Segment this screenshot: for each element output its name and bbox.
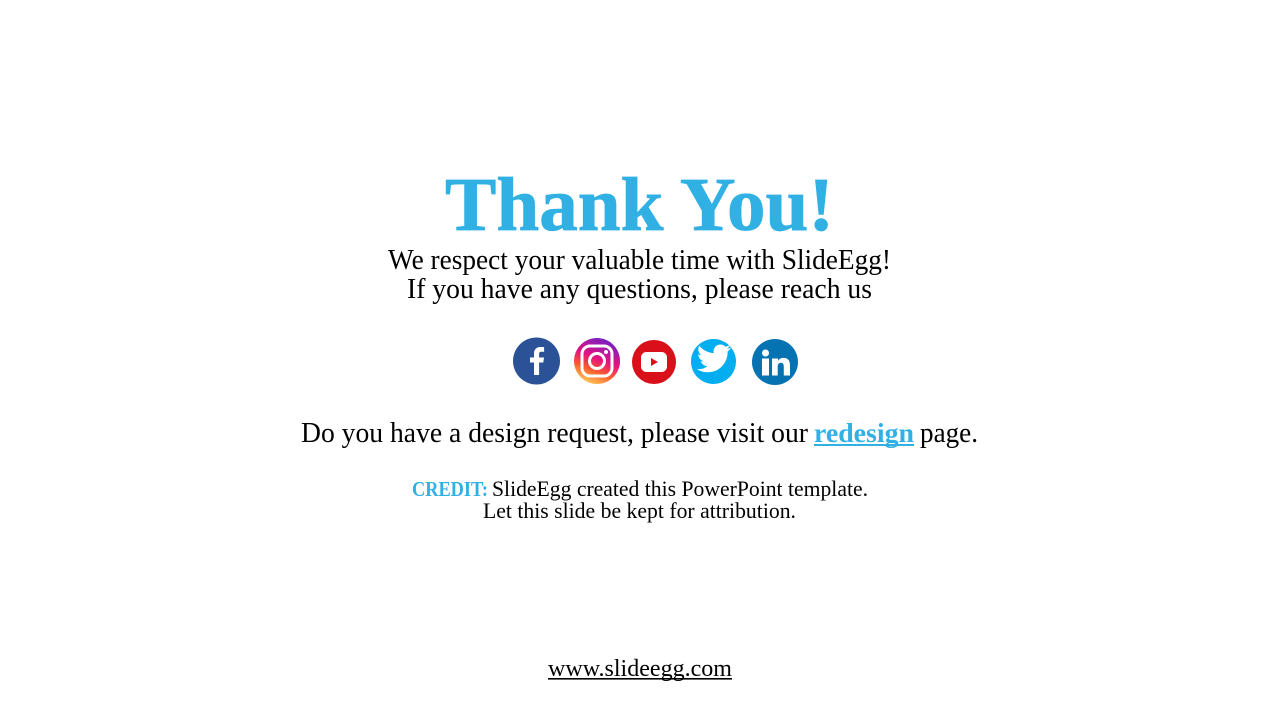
website link: www.slideegg.com xyxy=(548,656,732,682)
icon: linkedin xyxy=(752,339,798,385)
icon: youtube xyxy=(632,340,676,384)
icon: twitter xyxy=(691,339,736,384)
credit text xyxy=(412,476,868,523)
intro text: If you have any questions, please reach us xyxy=(407,274,872,305)
intro text: We respect your valuable time with SlideEgg! xyxy=(388,245,891,276)
design request text: redesign xyxy=(814,418,914,448)
credit text: CREDIT: xyxy=(412,477,488,501)
credit text: SlideEgg created this PowerPoint template. xyxy=(492,476,868,501)
social icons xyxy=(513,338,798,385)
title: Thank You! xyxy=(445,163,834,247)
icon: facebook xyxy=(513,338,560,384)
design request text: page. xyxy=(920,418,978,449)
icon: instagram xyxy=(574,338,620,384)
credit text: Let this slide be kept for attribution. xyxy=(483,498,796,523)
design request text: Do you have a design request, please visit our xyxy=(301,418,809,449)
intro text xyxy=(388,245,891,305)
